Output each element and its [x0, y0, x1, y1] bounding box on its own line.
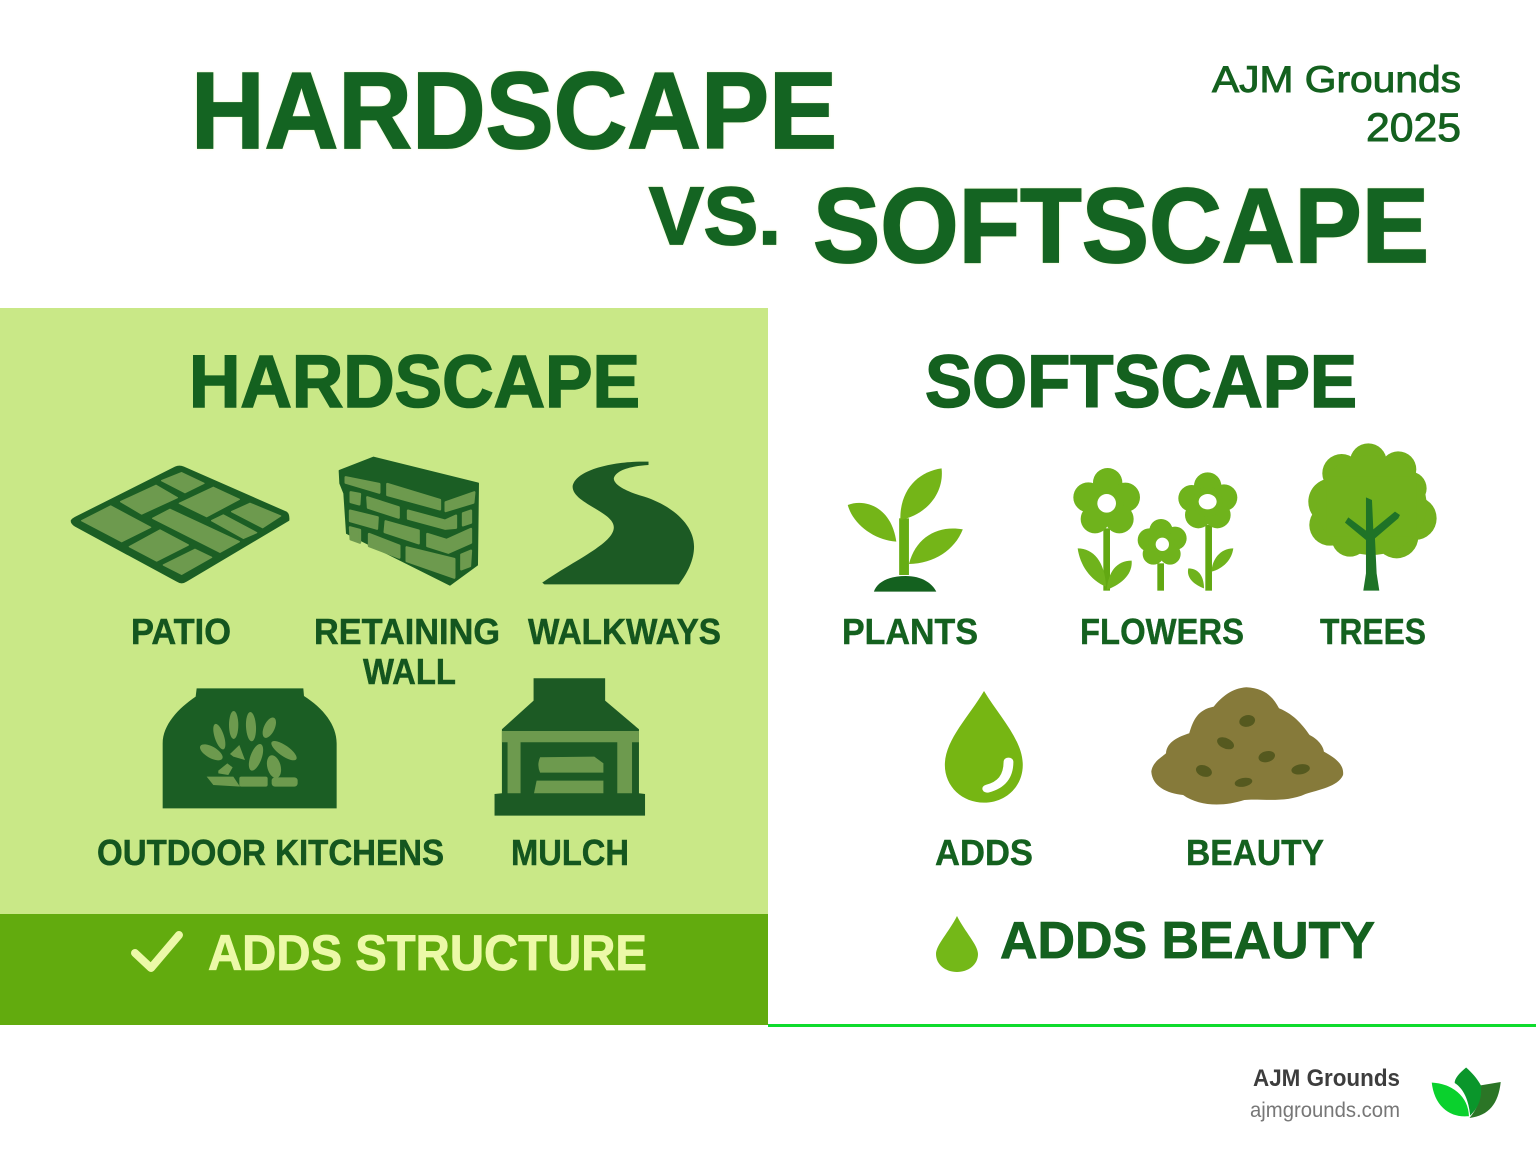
icon: soil pile [1151, 687, 1343, 804]
icon: fireplace [495, 678, 645, 816]
hardscape labels: WALL [363, 651, 456, 692]
softscape labels [842, 611, 1426, 873]
icon: logo leaves [1431, 1068, 1501, 1118]
panel: hardscape [0, 308, 768, 1025]
title: SOFTSCAPE [813, 167, 1429, 285]
icon: walkway [542, 462, 694, 584]
hardscape labels: WALKWAYS [528, 611, 721, 652]
softscape labels: FLOWERS [1080, 611, 1244, 652]
banner text: ADDS STRUCTURE [208, 925, 647, 981]
hardscape labels: RETAINING [314, 611, 500, 652]
icon: outdoor kitchen [163, 688, 337, 808]
footer brand: AJM Grounds [1253, 1065, 1400, 1092]
icon: retaining wall [339, 457, 478, 585]
hardscape labels [97, 611, 721, 873]
title [191, 50, 1429, 285]
title: HARDSCAPE [191, 50, 837, 172]
brand and year [1212, 59, 1461, 150]
divider line [768, 1024, 1536, 1027]
softscape labels: PLANTS [842, 611, 978, 652]
softscape labels: TREES [1320, 611, 1426, 652]
callout text: ADDS BEAUTY [1000, 912, 1375, 970]
footer brand: ajmgrounds.com [1250, 1099, 1400, 1122]
softscape labels: ADDS [935, 832, 1033, 873]
icon: water drop [945, 691, 1023, 803]
hardscape labels: PATIO [131, 611, 231, 652]
icon: small drop [936, 916, 978, 972]
icon: tree [1308, 443, 1437, 591]
icon: patio [71, 466, 289, 583]
icon: flowers [1073, 468, 1237, 591]
heading: softscape: SOFTSCAPE [925, 340, 1357, 423]
softscape labels: BEAUTY [1186, 832, 1324, 873]
callout: adds beauty [936, 912, 1375, 972]
hardscape labels: OUTDOOR KITCHENS [97, 832, 444, 873]
icon: check mark [135, 935, 179, 968]
heading: hardscape: HARDSCAPE [189, 340, 640, 423]
title: VS. [649, 171, 781, 262]
footer brand [1250, 1065, 1400, 1122]
brand and year: 2025 [1366, 106, 1461, 150]
banner: adds structure [0, 914, 768, 1025]
hardscape labels: MULCH [511, 832, 629, 873]
icon: plant [848, 468, 963, 592]
brand and year: AJM Grounds [1212, 59, 1461, 100]
